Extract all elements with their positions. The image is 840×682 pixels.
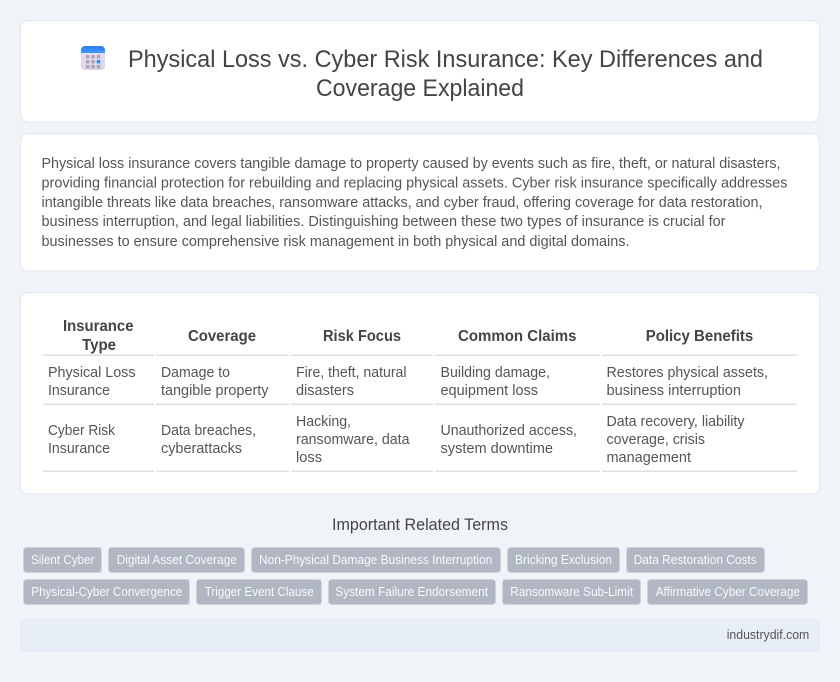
table row: physical loss insurance: Physical Loss [48,365,136,381]
table row: physical loss insurance: Restores physical assets, [606,365,768,381]
panel: related term tags [24,548,808,604]
text block: description paragraph [42,156,787,250]
table row: physical loss insurance: Damage to [161,365,230,381]
footer: industrydif.com [727,628,809,642]
table row: physical loss insurance: tangible property [161,383,269,399]
table header [63,318,753,354]
table header: Insurance [63,318,134,335]
text block: description paragraph: businesses to ensure comprehensive risk management in both physical and digital domains. [42,234,630,250]
title: Coverage Explained [316,75,524,102]
title [128,46,763,102]
text block: description paragraph: Physical loss insurance covers tangible damage to property caused by events such as fire, theft, or natural disasters, [42,156,780,172]
table row: cyber risk insurance: Hacking, [296,414,351,430]
table row: cyber risk insurance: Data breaches, [161,423,256,439]
table row: cyber risk insurance: management [606,450,691,466]
footer [20,618,820,652]
table row: physical loss insurance: disasters [296,383,354,399]
title: Physical Loss vs. Cyber Risk Insurance: Key Differences and [128,46,763,73]
table row: cyber risk insurance: loss [296,450,322,466]
panel: header [20,20,820,122]
table row: physical loss insurance: equipment loss [440,383,538,399]
table header: Type [82,337,116,354]
table header: Common Claims [458,328,577,345]
table row: cyber risk insurance: Cyber Risk [48,423,116,439]
panel: related term tags: Trigger Event Clause [205,585,314,599]
table header: Risk Focus [323,328,401,345]
table row: cyber risk insurance: Unauthorized access, [440,423,577,439]
panel: related term tags: System Failure Endorsement [335,585,488,599]
table row: cyber risk insurance: coverage, crisis [606,432,705,448]
panel: related term tags: Physical-Cyber Convergence [31,585,182,599]
heading: important related terms: Important Related Terms [332,516,508,534]
table header: Coverage [188,328,256,345]
panel: related term tags: Bricking Exclusion [515,553,612,567]
panel: related term tags: Affirmative Cyber Coverage [656,585,800,599]
table header: Policy Benefits [646,328,753,345]
panel: description [20,134,820,271]
table row: cyber risk insurance: Insurance [48,441,110,457]
table row: cyber risk insurance: Data recovery, liability [606,414,745,430]
icon: calendar [81,46,105,70]
table row: physical loss insurance: Fire, theft, natural [296,365,406,381]
text block: description paragraph: providing financial protection for rebuilding and replacing physical assets. Cyber risk insurance specifically addresses [42,176,787,192]
table row: physical loss insurance [48,365,768,399]
table row: physical loss insurance: Building damage, [440,365,550,381]
panel: related term tags: Data Restoration Costs [634,553,757,567]
panel: related term tags: Non-Physical Damage Business Interruption [259,553,492,567]
table row: physical loss insurance: Insurance [48,383,110,399]
panel: related term tags: Digital Asset Coverage [117,553,237,567]
text block: description paragraph: business interruption, and legal liabilities. Distinguishing between these two types of insurance is crucial for [42,214,726,230]
table row: cyber risk insurance [48,414,745,466]
panel: related term tags: Silent Cyber [31,553,94,567]
table row: cyber risk insurance: system downtime [440,441,553,457]
panel: comparison table [20,292,820,494]
panel: related term tags: Ransomware Sub-Limit [510,585,633,599]
text block: description paragraph: intangible threats like data breaches, ransomware attacks, and cyber fraud, offering coverage for data restoration, [42,195,762,211]
table row: cyber risk insurance: cyberattacks [161,441,242,457]
table row: physical loss insurance: business interruption [606,383,741,399]
table row: cyber risk insurance: ransomware, data [296,432,410,448]
